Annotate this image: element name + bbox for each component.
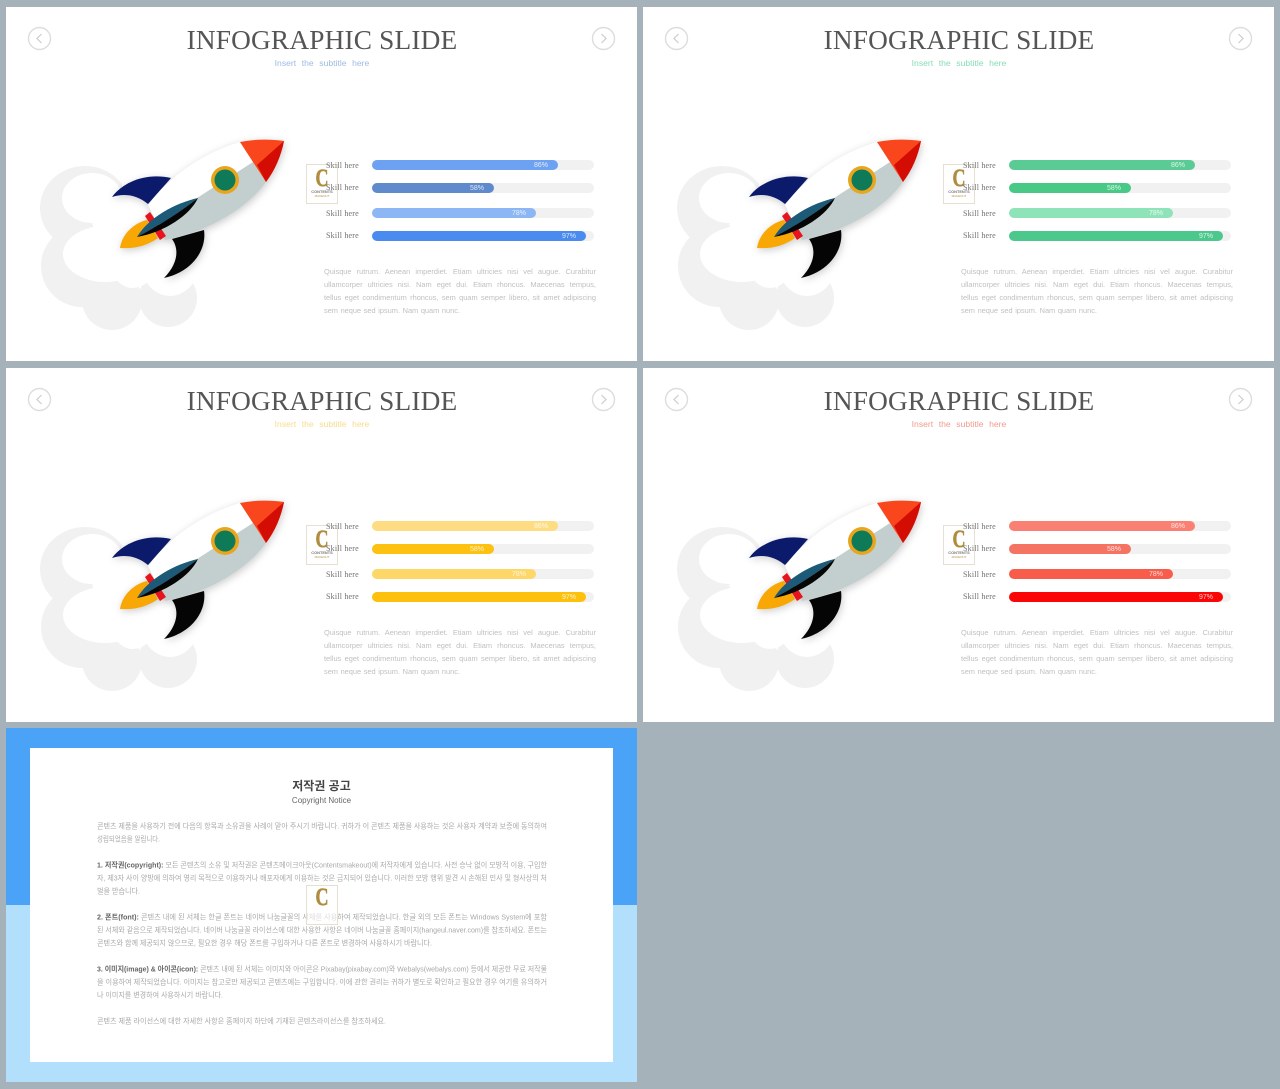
- skill label 3: Skill here: [326, 570, 359, 579]
- notice text: 3. 이미지(image) & 아이콘(icon): 콘텐츠 내에 된 서체는 이미지와 아이콘은 Pixabay(pixabay.com)와 Webalys(webalys.com) 등에서 제공한 무료 저작물: [97, 964, 547, 974]
- skill bar 3: 78%: [512, 571, 526, 578]
- logo watermark: CONTENTS: [311, 189, 333, 194]
- icon: rocket: [749, 499, 924, 642]
- skill bar 4: 97%: [562, 594, 576, 601]
- skill bar 1: 86%: [534, 523, 548, 530]
- title: INFOGRAPHIC SLIDE: [824, 25, 1094, 55]
- skill bar 2: [372, 183, 594, 193]
- icon: smoke cloud: [677, 166, 834, 330]
- skill label 2: Skill here: [963, 183, 996, 192]
- skill bar 3: 78%: [512, 210, 526, 217]
- skill bar 4: 97%: [1199, 594, 1213, 601]
- subtitle: Insert the subtitle here: [912, 58, 1006, 68]
- title: INFOGRAPHIC SLIDE: [824, 386, 1094, 416]
- body paragraph: [324, 267, 596, 315]
- skill bar 1: 86%: [1171, 162, 1185, 169]
- panel: slide 2 green: [643, 7, 1274, 361]
- notice text: 1. 저작권(copyright): 모든 콘텐츠의 소유 및 저작권은 콘텐츠메이크아웃(Contentsmakeout)에 저작자에게 있습니다. 사전 승낙 없이 모방적 이용, 구입한: [97, 860, 547, 870]
- logo watermark: MAKEOUT: [315, 555, 329, 559]
- logo watermark: [306, 525, 338, 565]
- skill bar 2: 58%: [470, 185, 484, 192]
- skill bar 3: [372, 569, 594, 579]
- skill label 4: Skill here: [326, 592, 359, 601]
- body paragraph: ullamcorper ultricies nisi. Nam eget dui. Etiam rhoncus. Maecenas tempus,: [961, 280, 1233, 289]
- panel: slide 1 blue: [6, 7, 637, 361]
- skill bar 3: [1009, 569, 1231, 579]
- skill bar 4: [372, 592, 594, 602]
- skill bar 4: 97%: [562, 233, 576, 240]
- panel: slide 4 red: [643, 368, 1274, 722]
- body paragraph: ullamcorper ultricies nisi. Nam eget dui. Etiam rhoncus. Maecenas tempus,: [324, 641, 596, 650]
- skill bar 2: 58%: [1107, 185, 1121, 192]
- icon: previous arrow: [664, 388, 688, 412]
- skill label 3: Skill here: [963, 570, 996, 579]
- skill bar 3: [1009, 208, 1231, 218]
- subtitle: Insert the subtitle here: [275, 58, 369, 68]
- body paragraph: sem neque sed ipsum. Nam quam nunc.: [961, 306, 1097, 315]
- body paragraph: [961, 628, 1233, 676]
- body paragraph: tellus eget condimentum rhoncus, sem quam semper libero, sit amet adipiscing: [961, 293, 1233, 302]
- skill bar 4: [1009, 231, 1231, 241]
- notice text: 나 이미지를 변경하여 사용하시기 바랍니다.: [97, 990, 223, 1000]
- subtitle: Insert the subtitle here: [912, 419, 1006, 429]
- icon: previous arrow: [28, 388, 52, 412]
- body paragraph: Quisque rutrum. Aenean imperdiet. Etiam ultricies nisi vel augue. Curabitur: [324, 267, 596, 276]
- skill bar 4: 97%: [1199, 233, 1213, 240]
- subtitle: Insert the subtitle here: [275, 419, 369, 429]
- logo watermark: MAKEOUT: [952, 555, 966, 559]
- skill bar 2: [1009, 544, 1231, 554]
- skill bar 2: 58%: [1107, 546, 1121, 553]
- skill label 1: Skill here: [963, 161, 996, 170]
- notice text: 2. 폰트(font): 콘텐츠 내에 된 서체는 한글 폰트는 네이버 나눔글꼴의 서체를 사용하여 제작되었습니다. 한글 외의 모든 폰트는 Windows System에 포함: [97, 912, 547, 922]
- icon: next arrow: [592, 388, 616, 412]
- skill label 3: Skill here: [963, 209, 996, 218]
- skill bar 3: 78%: [1149, 210, 1163, 217]
- icon: next arrow: [592, 26, 616, 50]
- skill bar 1: [1009, 160, 1231, 170]
- body paragraph: sem neque sed ipsum. Nam quam nunc.: [324, 667, 460, 676]
- icon: rocket: [112, 138, 288, 281]
- logo watermark: [943, 164, 975, 204]
- skill bar 4: [372, 231, 594, 241]
- logo watermark: CONTENTS: [948, 550, 970, 555]
- notice text: 콘텐츠 제품을 사용하기 전에 다음의 항목과 소유권을 사례이 맡아 주시기 바랍니다. 귀하가 이 콘텐츠 제품을 사용하는 것은 사용자 계약과 보증에 동의하여: [97, 822, 547, 830]
- skill label 1: Skill here: [326, 161, 359, 170]
- notice text: 벌을 받습니다.: [97, 886, 140, 896]
- heading: 저작권 공고: [292, 779, 351, 793]
- body paragraph: sem neque sed ipsum. Nam quam nunc.: [324, 306, 460, 315]
- subheading: Copyright Notice: [292, 796, 351, 805]
- icon: rocket: [749, 138, 924, 281]
- icon: previous arrow: [28, 26, 52, 50]
- icon: next arrow: [1228, 26, 1252, 50]
- notice text: 자, 제3자 사이 양방에 의하여 영리 목적으로 이용하거나 배포자에게 이용하는 것은 금지되어 있습니다. 이러한 모방 행위 발견 시 손해된 민사 및 형사상의 처: [97, 874, 547, 882]
- icon: previous arrow: [664, 26, 688, 50]
- logo watermark: C: [315, 526, 329, 553]
- logo watermark: [306, 164, 338, 204]
- body paragraph: Quisque rutrum. Aenean imperdiet. Etiam ultricies nisi vel augue. Curabitur: [324, 628, 596, 637]
- icon: smoke cloud: [40, 527, 197, 691]
- skill label 1: Skill here: [963, 522, 996, 531]
- logo watermark: CONTENTS: [311, 550, 333, 555]
- icon: next arrow: [1228, 388, 1252, 412]
- skill label 3: Skill here: [326, 209, 359, 218]
- logo watermark: [306, 885, 338, 925]
- body paragraph: sem neque sed ipsum. Nam quam nunc.: [961, 667, 1097, 676]
- notice text: 콘텐츠 제품 라이선스에 대한 자세한 사항은 홈페이지 하단에 기재된 콘텐츠라이선스를 참조하세요.: [97, 1016, 386, 1026]
- logo watermark: CONTENTS: [948, 189, 970, 194]
- skill bar 2: [1009, 183, 1231, 193]
- skill bar 1: [372, 160, 594, 170]
- skill bar 1: [372, 521, 594, 531]
- icon: smoke cloud: [677, 527, 834, 691]
- body paragraph: tellus eget condimentum rhoncus, sem quam semper libero, sit amet adipiscing: [324, 293, 596, 302]
- notice card: [30, 748, 613, 1062]
- skill label 2: Skill here: [326, 544, 359, 553]
- skill bar 1: 86%: [534, 162, 548, 169]
- icon: rocket: [112, 499, 288, 642]
- skill label 4: Skill here: [963, 592, 996, 601]
- skill label 4: Skill here: [326, 231, 359, 240]
- icon: smoke cloud: [40, 166, 197, 330]
- skill bar 1: 86%: [1171, 523, 1185, 530]
- logo watermark: C: [952, 526, 966, 553]
- body paragraph: tellus eget condimentum rhoncus, sem quam semper libero, sit amet adipiscing: [324, 654, 596, 663]
- panel: slide 3 yellow: [6, 368, 637, 722]
- skill bar 4: [1009, 592, 1231, 602]
- logo watermark: C: [315, 165, 329, 192]
- logo watermark: MAKEOUT: [952, 194, 966, 198]
- skill bar 3: 78%: [1149, 571, 1163, 578]
- skill bar 1: [1009, 521, 1231, 531]
- logo watermark: C: [952, 165, 966, 192]
- skill label 2: Skill here: [963, 544, 996, 553]
- notice text: 콘텐츠와 함께 제공되지 않으므로, 필요한 경우 해당 폰트를 구입하거나 다른 폰트로 변경하여 사용하시기 바랍니다.: [97, 938, 432, 948]
- body paragraph: Quisque rutrum. Aenean imperdiet. Etiam ultricies nisi vel augue. Curabitur: [961, 628, 1233, 637]
- skill bar 2: 58%: [470, 546, 484, 553]
- body paragraph: Quisque rutrum. Aenean imperdiet. Etiam ultricies nisi vel augue. Curabitur: [961, 267, 1233, 276]
- skill bar 2: [372, 544, 594, 554]
- notice text: 을 이용하여 제작되었습니다. 이미지는 참고로만 제공되고 콘텐츠에는 구입합니다. 이에 관한 권리는 귀하가 별도로 확인하고 필요한 경우 여기를 유의하거: [97, 978, 547, 986]
- body paragraph: ullamcorper ultricies nisi. Nam eget dui. Etiam rhoncus. Maecenas tempus,: [961, 641, 1233, 650]
- title: INFOGRAPHIC SLIDE: [187, 386, 457, 416]
- skill label 1: Skill here: [326, 522, 359, 531]
- skill label 2: Skill here: [326, 183, 359, 192]
- body paragraph: [324, 628, 596, 676]
- body paragraph: tellus eget condimentum rhoncus, sem quam semper libero, sit amet adipiscing: [961, 654, 1233, 663]
- notice text: 된 서체와 같음으로 제작되었습니다. 네이버 나눔글꼴 라이선스에 대한 사용한 사항은 네이버 나눔글꼴 홈페이지(hangeul.naver.com)를 참조하세요. 폰트는: [97, 926, 547, 934]
- panel: copyright notice: [6, 728, 637, 1082]
- logo watermark: MAKEOUT: [315, 194, 329, 198]
- skill bar 3: [372, 208, 594, 218]
- skill label 4: Skill here: [963, 231, 996, 240]
- notice text: 성립되었음을 알립니다.: [97, 834, 160, 844]
- body paragraph: [961, 267, 1233, 315]
- body paragraph: ullamcorper ultricies nisi. Nam eget dui. Etiam rhoncus. Maecenas tempus,: [324, 280, 596, 289]
- notice text: [97, 822, 547, 1026]
- title: INFOGRAPHIC SLIDE: [187, 25, 457, 55]
- logo watermark: [943, 525, 975, 565]
